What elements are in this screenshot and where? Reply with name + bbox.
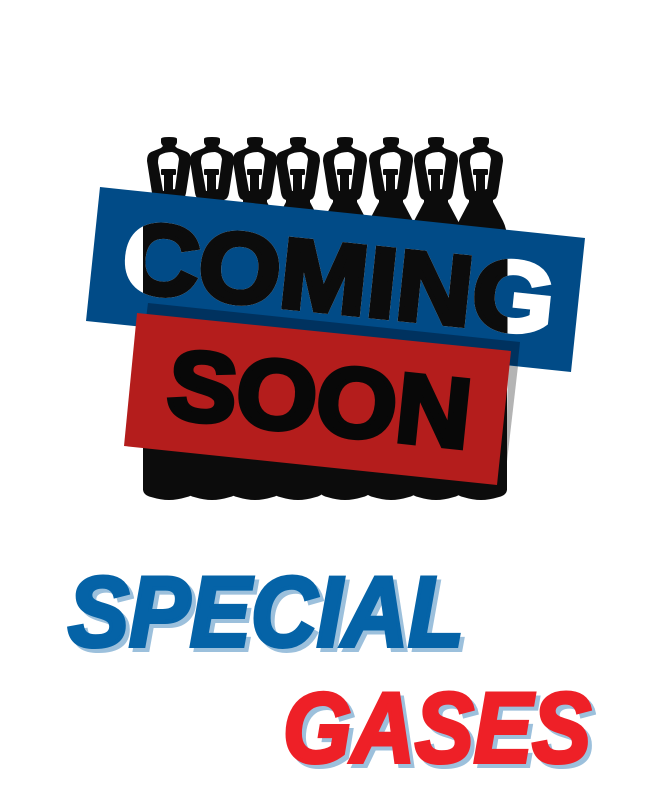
heading: SPECIAL: SPECIAL [72,560,468,671]
heading: GASES: GASES [287,676,595,787]
heading: GASES: GASES [283,672,591,783]
red banner drop shadow on blue [145,303,520,366]
heading: SPECIAL: SPECIAL [68,556,464,667]
SOON text: SOON [163,328,477,469]
illustration: row of gas cylinders [143,137,507,500]
blue banner [86,187,585,372]
red banner [124,313,511,485]
COMING text knocked out of banner: COMING [118,200,560,355]
shadow sliver right of red banner [506,364,518,470]
COMING text knocked out of banner: COMING [118,200,560,355]
